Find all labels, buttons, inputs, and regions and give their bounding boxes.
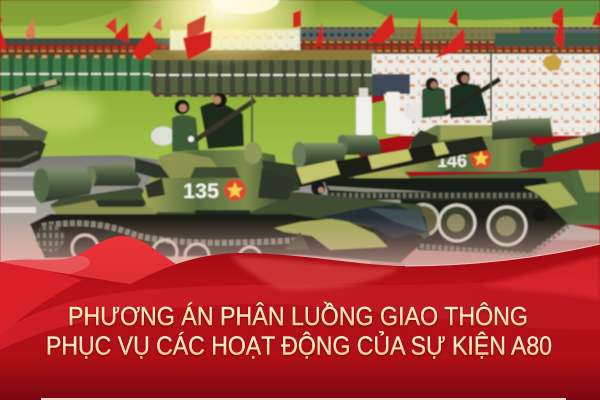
star roundel 135 [224, 179, 246, 201]
flags [0, 6, 600, 61]
road [0, 155, 600, 270]
turret gunners on tank 135 [151, 93, 255, 152]
front fender tank 146 [524, 182, 578, 209]
lighter sweep [0, 272, 600, 350]
tank 146 [284, 50, 600, 255]
turret 146 [398, 125, 541, 172]
road wheels tank 135 [72, 235, 261, 269]
title: PHỤC VỤ CÁC HOẠT ĐỘNG CỦA SỰ KIỆN A80 [46, 330, 552, 360]
left partial tank [0, 79, 63, 168]
bottom rule [41, 398, 566, 400]
tank 135 [30, 93, 430, 269]
fuel drums tank 135 [33, 162, 141, 203]
third tank gun [533, 132, 600, 160]
wave crest [0, 236, 176, 300]
turret gunners on tank 146 [404, 50, 500, 121]
crowd formations [0, 27, 600, 136]
number 146: 146 [437, 151, 467, 171]
hull tank 146 [322, 166, 600, 222]
main gun tank 135 [284, 136, 488, 188]
turret 135 [142, 150, 280, 212]
title: PHƯƠNG ÁN PHÂN LUỒNG GIAO THÔNG [68, 301, 528, 331]
star roundel 146 [470, 148, 492, 168]
driver [311, 181, 325, 195]
left fold [0, 262, 82, 336]
sunlight glare [127, 0, 317, 66]
title [46, 301, 552, 360]
banner body [0, 244, 600, 400]
red banner [0, 236, 600, 400]
front hull tank 146 [566, 170, 600, 225]
number 135: 135 [183, 180, 219, 203]
road wheels tank 146 [400, 200, 568, 254]
pink fade over lower scene [0, 218, 600, 270]
top drums tank 146 [492, 118, 553, 140]
rear fuel drums tank 146 [292, 135, 381, 168]
parade grass [0, 91, 400, 170]
hillside background [0, 0, 600, 42]
officer figures [356, 88, 412, 135]
dark underside and track [30, 214, 425, 263]
front fenders tank 135 [274, 218, 388, 250]
camo bundle [258, 168, 296, 200]
lower deck stripes [50, 207, 160, 217]
parade photo scene [0, 0, 600, 270]
hull tank 135 [50, 187, 430, 262]
